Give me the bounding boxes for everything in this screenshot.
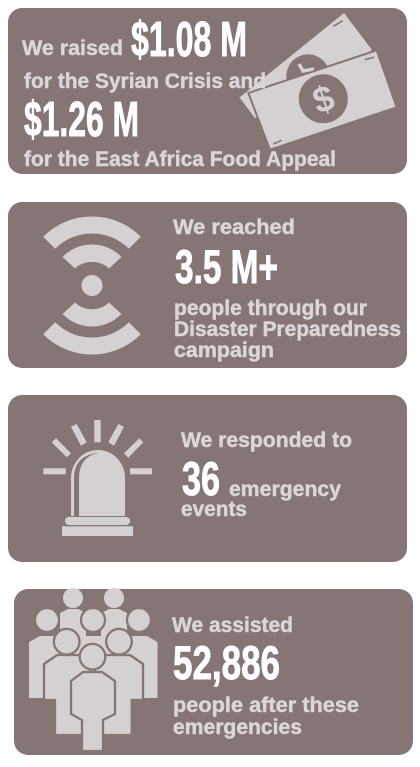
text: emergencies: emergencies [173,716,302,739]
number: 1.08 M: $1.08 M [131,13,247,67]
panel: people assisted [14,588,413,755]
text: for the Syrian Crisis and: for the Syrian Crisis and [24,70,266,93]
icon: banknotes: $ [308,76,339,122]
panel: funds raised [8,8,407,174]
number: 52,886: 52,886 [173,636,280,689]
text: people through our: people through our [174,297,367,320]
text: we assisted: We assisted [172,614,293,637]
text: people after these: people after these [173,694,359,717]
panel: emergency events [8,395,407,562]
text: for the East Africa Food Appeal: for the East Africa Food Appeal [24,148,336,171]
text: events: events [181,498,247,521]
text: we responded to: We responded to [181,429,352,452]
number: 36: 36 [182,452,220,505]
icon: siren [43,420,152,536]
text: emergency: emergency [229,478,341,501]
number: 3.5 M+: 3.5 M+ [175,240,278,293]
icon: banknotes [240,13,397,150]
text: Disaster Preparedness: Disaster Preparedness [174,318,401,341]
panel: disaster preparedness reach [8,202,407,368]
text: we raised: We raised [22,37,123,60]
icon: crowd of people [29,588,158,751]
number: 1.26 M: $1.26 M [24,93,139,147]
text: campaign: campaign [174,339,274,362]
icon: broadcast signal [43,216,141,355]
text: we reached: We reached [173,216,295,239]
